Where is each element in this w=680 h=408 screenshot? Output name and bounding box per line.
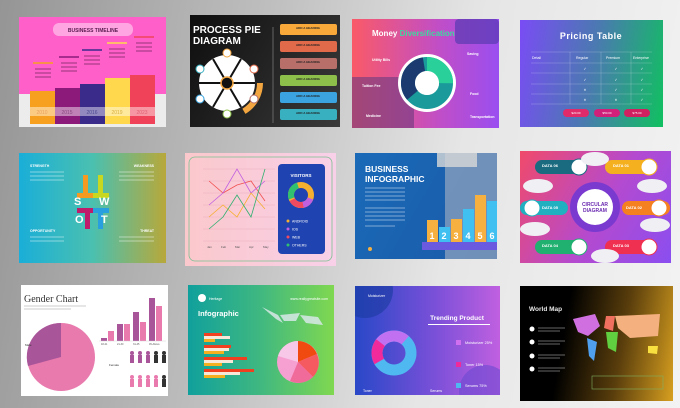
title: DIAGRAM: [193, 36, 241, 47]
legend: Moisturizer 25%: [465, 341, 493, 345]
price buttons: $20.00: [571, 111, 581, 115]
title: World Map: [529, 306, 562, 313]
swot cross: [74, 175, 110, 229]
card: money diversification: Saving: [467, 52, 478, 56]
title: INFOGRAPHIC: [365, 174, 424, 184]
clouds: [520, 152, 670, 263]
card: infographic map: Heritage: [209, 297, 222, 301]
card: trending product: Serums: [430, 389, 442, 393]
3d bars: 6: [489, 231, 495, 241]
line chart: Feb: [221, 245, 227, 249]
line chart: [203, 169, 275, 249]
card: pricing table: ✕: [615, 98, 618, 102]
donut: [398, 54, 456, 112]
title: Pricing Table: [560, 31, 622, 41]
price buttons: $75.00: [632, 111, 642, 115]
card: pricing table: [520, 20, 663, 127]
card: pricing table: ✓: [641, 88, 644, 92]
line chart: May: [263, 245, 269, 249]
heading boxes: ADD A HEADING: [296, 26, 321, 30]
line chart: Apr: [249, 245, 254, 249]
bar chart: [204, 333, 254, 378]
data pills: DATA 06: [542, 163, 559, 168]
heading boxes: ADD A HEADING: [296, 60, 321, 64]
3d bars: 3: [453, 231, 459, 241]
3d bars: [422, 195, 504, 250]
heading boxes: ADD A HEADING: [296, 43, 321, 47]
visitors panel: OTHERS: [292, 244, 307, 248]
bars: [30, 75, 155, 124]
data pills: DATA 03: [613, 243, 630, 248]
card: pricing table: ✓: [615, 78, 618, 82]
card: money diversification: Food: [470, 92, 479, 96]
swot cross: T: [101, 214, 108, 226]
bars: 2010: [36, 110, 48, 116]
data pills: [520, 159, 670, 255]
card: pricing table: ✓: [584, 78, 587, 82]
visitors panel: IOS: [292, 228, 299, 232]
heading boxes: ADD A HEADING: [296, 94, 321, 98]
card: infographic map: www.reallygreatsite.com: [290, 297, 328, 301]
data pills: DATA 05: [542, 205, 559, 210]
center circle: DIAGRAM: [583, 208, 607, 214]
title: Infographic: [198, 309, 239, 318]
title: PROCESS PIE: [193, 25, 261, 36]
card: SWOT: STRENGTH: [30, 164, 50, 168]
card: money diversification: Tuition Fee: [362, 84, 380, 88]
card: trending product: Toner: [363, 389, 373, 393]
card: SWOT: WEAKNESS: [134, 164, 155, 168]
card: money diversification: Utility Bills: [372, 58, 390, 62]
title: [428, 315, 490, 325]
line chart: Jan: [207, 245, 212, 249]
list: [530, 326, 534, 372]
card: pricing table: ✕: [584, 88, 587, 92]
heading boxes: [280, 24, 337, 120]
line chart: Mar: [235, 245, 240, 249]
title: [365, 164, 424, 184]
card: pricing table: Regular: [576, 56, 589, 60]
card: pricing table: ✓: [641, 67, 644, 71]
title: BUSINESS: [365, 164, 409, 174]
card: pricing table: ✓: [641, 78, 644, 82]
title: [193, 25, 261, 47]
donut: [371, 330, 417, 376]
card: process pie diagram: [190, 15, 340, 127]
title: Gender Chart: [24, 294, 78, 305]
bar chart: [99, 298, 166, 346]
card: gender chart: Female: [109, 363, 119, 367]
heading boxes: ADD A HEADING: [296, 77, 321, 81]
title pill: [53, 23, 133, 36]
swot cross: O: [75, 214, 84, 226]
3d bars: 1: [429, 231, 435, 241]
visitors panel: WEB: [292, 236, 301, 240]
center circle: [570, 182, 620, 232]
card: SWOT: [19, 153, 166, 263]
pie chart: [27, 323, 95, 391]
bar chart: 31-45: [133, 343, 140, 346]
card: money diversification: [352, 19, 499, 128]
3d bars: 2: [441, 231, 447, 241]
card: business timeline: [19, 17, 166, 127]
title: Money Diversification: [372, 29, 455, 38]
card: line chart visitors: [185, 153, 336, 266]
card: pricing table: ✓: [615, 67, 618, 71]
center circle: CIRCULAR: [582, 202, 608, 208]
people icons: [130, 351, 166, 387]
card: infographic map: [188, 285, 334, 395]
card: money diversification: Medicine: [366, 114, 381, 118]
data pills: DATA 02: [626, 205, 643, 210]
visitors panel: [278, 164, 325, 254]
bars: 2019: [111, 110, 123, 116]
card: gender chart: Male: [25, 343, 32, 347]
bar chart: 21-30: [117, 343, 124, 346]
visitors panel: ANDROID: [292, 220, 309, 224]
card: world map: [520, 286, 673, 401]
3d bars: 4: [465, 231, 471, 241]
bar chart: 18-21: [101, 343, 108, 346]
legend: Toner 15%: [465, 363, 484, 367]
map: [262, 307, 323, 325]
card: business infographic: [355, 153, 497, 259]
title: Trending Product: [430, 315, 485, 322]
card: pricing table: ✓: [584, 67, 587, 71]
swot cross: S: [74, 196, 81, 208]
card: SWOT: THREAT: [140, 229, 155, 233]
price buttons: $50.00: [602, 111, 612, 115]
card: money diversification: Transportation: [470, 115, 495, 119]
data pills: DATA 01: [613, 163, 630, 168]
bars: 2023: [136, 110, 148, 116]
heading boxes: ADD A HEADING: [296, 111, 321, 115]
legend: [456, 340, 493, 388]
3d bars: 5: [477, 231, 483, 241]
table: [531, 52, 652, 104]
swot cross: W: [99, 196, 110, 208]
card: pricing table: ✕: [584, 98, 587, 102]
bars: 2015: [61, 110, 73, 116]
card: circular diagram: [520, 151, 671, 263]
card: pricing table: Premium: [606, 56, 620, 60]
visitors panel: VISITORS: [291, 173, 311, 178]
data pills: DATA 04: [542, 243, 559, 248]
map: [573, 314, 660, 361]
pie: [277, 341, 319, 383]
card: pricing table: ✓: [641, 98, 644, 102]
card: pricing table: ✓: [615, 88, 618, 92]
card: pricing table: Detail: [532, 56, 541, 60]
legend: Serums 75%: [465, 384, 487, 388]
bar chart: 45-Above: [149, 343, 160, 346]
price buttons: [563, 109, 650, 117]
card: gender chart: [21, 285, 168, 396]
card: pricing table: Enterprise: [633, 56, 649, 60]
bars: 2016: [86, 110, 98, 116]
card: SWOT: OPPORTUNITY: [30, 229, 56, 233]
pie wheel: [194, 49, 260, 118]
card: trending product: Moisturizer: [368, 294, 386, 298]
title pill: BUSINESS TIMELINE: [68, 28, 119, 34]
card: trending product: [355, 286, 500, 395]
